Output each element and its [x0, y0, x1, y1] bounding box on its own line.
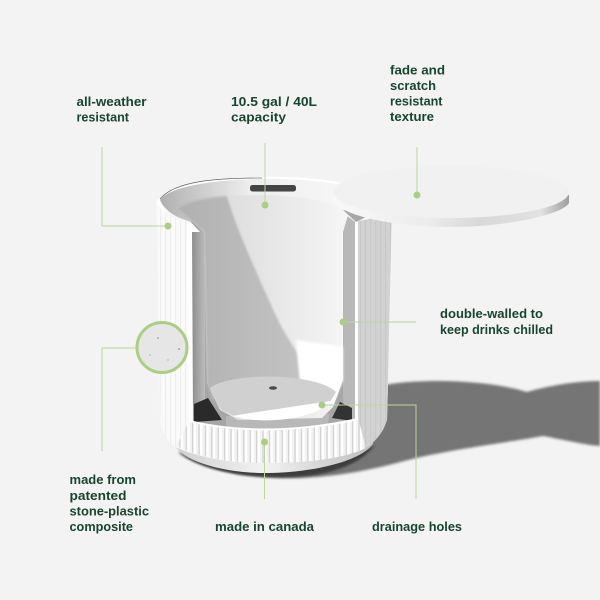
- rim dark line: [160, 178, 262, 199]
- under-floor strip: [226, 414, 330, 428]
- lid edge: [333, 193, 569, 227]
- cast shadow on floor: [178, 381, 600, 478]
- rim: [156, 177, 393, 213]
- callout: fade and scratch resistant texture: fade and: [390, 62, 445, 78]
- floor sunlight: [232, 401, 331, 420]
- callout: fade and scratch resistant texture: scratch: [390, 78, 436, 93]
- callout: drainage holes: drainage holes: [372, 519, 462, 534]
- lit floor patch: [296, 340, 343, 405]
- callout: stone-plastic composite: stone-plastic: [70, 504, 149, 518]
- white cut edge left: [187, 220, 200, 423]
- cut-away cavity: [191, 216, 355, 430]
- wedge under lid: [343, 210, 372, 222]
- callout: stone-plastic composite: [70, 322, 187, 534]
- inner liner lit side: [176, 195, 349, 420]
- callout: made in canada: made in canada: [215, 519, 315, 534]
- callout: stone-plastic composite: composite: [70, 519, 133, 534]
- white cut edge right: [355, 220, 358, 421]
- callout: double-walled: keep drinks chilled: [440, 322, 553, 337]
- right wall gap: [343, 215, 356, 420]
- callout: double-walled: double-walled to: [440, 306, 543, 321]
- left dark corner: [194, 398, 222, 422]
- callout: drainage holes: [318, 402, 462, 534]
- callout: capacity: capacity: [231, 110, 287, 124]
- callout: fade and scratch resistant texture: texture: [390, 109, 434, 124]
- handle slot: [250, 185, 296, 192]
- callout: fade and scratch resistant texture: [390, 62, 445, 198]
- callout: capacity: [231, 94, 317, 208]
- callout: fade and scratch resistant texture: resistant: [390, 94, 443, 108]
- callout: all-weather resistant: all-weather: [76, 94, 146, 109]
- callout: all-weather resistant: resistant: [76, 110, 130, 124]
- product: cooler tub cutaway: [156, 177, 393, 473]
- callout: double-walled: [340, 306, 553, 337]
- rim inner surface: [160, 179, 385, 222]
- infographic canvas: [70, 65, 600, 534]
- left wall flutes: [157, 207, 192, 452]
- outer wall base: [156, 178, 393, 463]
- callout: all-weather resistant: [76, 94, 172, 230]
- base flutes band: [176, 418, 366, 463]
- callout: stone-plastic composite: patented: [70, 488, 127, 503]
- lid: [333, 166, 569, 227]
- band top edge: [189, 419, 358, 430]
- left wall gap: [191, 215, 205, 420]
- contact shadow under foot: [178, 445, 375, 477]
- right wall flutes: [358, 205, 392, 452]
- foot ring: [175, 430, 373, 473]
- right dark corner: [332, 402, 352, 421]
- callout: made in canada: [215, 438, 315, 534]
- callout: stone-plastic composite: made from: [70, 472, 136, 487]
- lid top: [333, 166, 569, 218]
- inner liner shadow: [176, 196, 310, 400]
- drain hole: [269, 386, 277, 390]
- callout: capacity: 10.5 gal / 40L: [231, 94, 317, 109]
- inner floor disc: [210, 376, 336, 418]
